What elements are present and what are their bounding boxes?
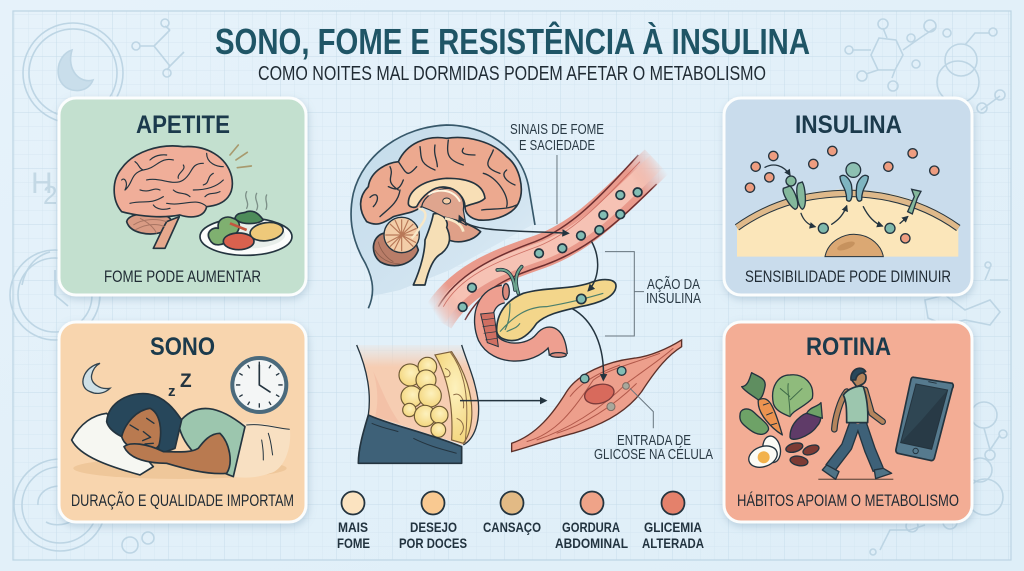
leader: hunger signals	[555, 155, 558, 224]
label: satiety line: E SACIEDADE	[519, 138, 595, 154]
decorative: H mark: H	[31, 167, 53, 200]
blood vessel	[437, 155, 657, 320]
legend item: glicemia alterada: ALTERADA	[642, 535, 704, 551]
legend	[337, 492, 704, 551]
icon: sleeping person with moon and clock	[72, 358, 290, 479]
icon: healthy food, walking man, phone	[740, 368, 953, 479]
legend item: mais fome: MAIS	[338, 519, 368, 535]
legend item: desejo por doces: DESEJO	[410, 519, 457, 535]
abdomen with fat	[357, 345, 479, 463]
pancreas and duodenum	[481, 267, 616, 357]
legend item: gordura abdominal: ABDOMINAL	[555, 535, 628, 551]
legend item: mais fome	[337, 492, 370, 551]
label: hunger and satiety signals: SINAIS DE FOME	[510, 122, 604, 138]
heading: rotina: ROTINA	[806, 333, 891, 361]
muscle	[512, 340, 682, 452]
icon: z letters: z	[168, 383, 176, 400]
decorative: left sketches	[10, 19, 184, 553]
label: insulin action: AÇÃO DA	[647, 276, 700, 293]
bracket: insulin action	[605, 252, 644, 336]
icon: big z letter: Z	[180, 371, 192, 392]
arrow: abdomen to muscle	[460, 398, 546, 403]
caption: sono: DURAÇÃO E QUALIDADE IMPORTAM	[71, 491, 294, 510]
arrow: brain to bloodstream	[459, 216, 568, 233]
panel: apetite	[59, 98, 306, 295]
caption: rotina: HÁBITOS APOIAM O METABOLISMO	[737, 491, 959, 510]
brain cross-section	[361, 137, 521, 285]
legend item: cansaço	[483, 492, 541, 535]
leader: glucose entry	[630, 388, 653, 428]
arrow: pancreas to muscle	[572, 308, 603, 380]
decorative: right molecules	[845, 19, 1008, 555]
label: in the cell: GLICOSE NA CÉLULA	[594, 446, 713, 463]
decorative: subscript 2 mark: 2	[43, 180, 57, 210]
subtitle: COMO NOITES MAL DORMIDAS PODEM AFETAR O METABOLISMO	[258, 62, 766, 85]
label: glucose entry: ENTRADA DE	[617, 433, 691, 449]
panel: sono	[59, 322, 306, 522]
caption: apetite: FOME PODE AUMENTAR	[104, 267, 261, 286]
heading: insulina: INSULINA	[795, 111, 902, 139]
panel: insulina	[724, 98, 972, 295]
icon: cell membrane and receptors	[737, 146, 958, 257]
icon: brain and plate	[114, 145, 292, 255]
legend item: glicemia alterada: GLICEMIA	[644, 519, 702, 535]
head silhouette	[351, 125, 535, 308]
label: insulin: INSULINA	[646, 291, 701, 307]
title: SONO, FOME E RESISTÊNCIA À INSULINA	[215, 20, 810, 62]
panel: rotina	[724, 322, 972, 522]
legend item: cansaço: CANSAÇO	[483, 519, 541, 535]
legend item: desejo por doces: POR DOCES	[399, 535, 467, 551]
heading: apetite: APETITE	[136, 111, 230, 139]
legend item: mais fome: FOME	[337, 535, 370, 551]
legend item: desejo por doces	[399, 492, 467, 551]
arrow: bloodstream to pancreas	[588, 242, 598, 291]
heading: sono: SONO	[150, 333, 215, 361]
central diagram	[351, 125, 682, 463]
legend item: gordura abdominal: GORDURA	[562, 519, 620, 535]
caption: insulina: SENSIBILIDADE PODE DIMINUIR	[745, 267, 951, 286]
legend item: glicemia alterada	[642, 492, 704, 551]
legend item: gordura abdominal	[555, 492, 628, 551]
